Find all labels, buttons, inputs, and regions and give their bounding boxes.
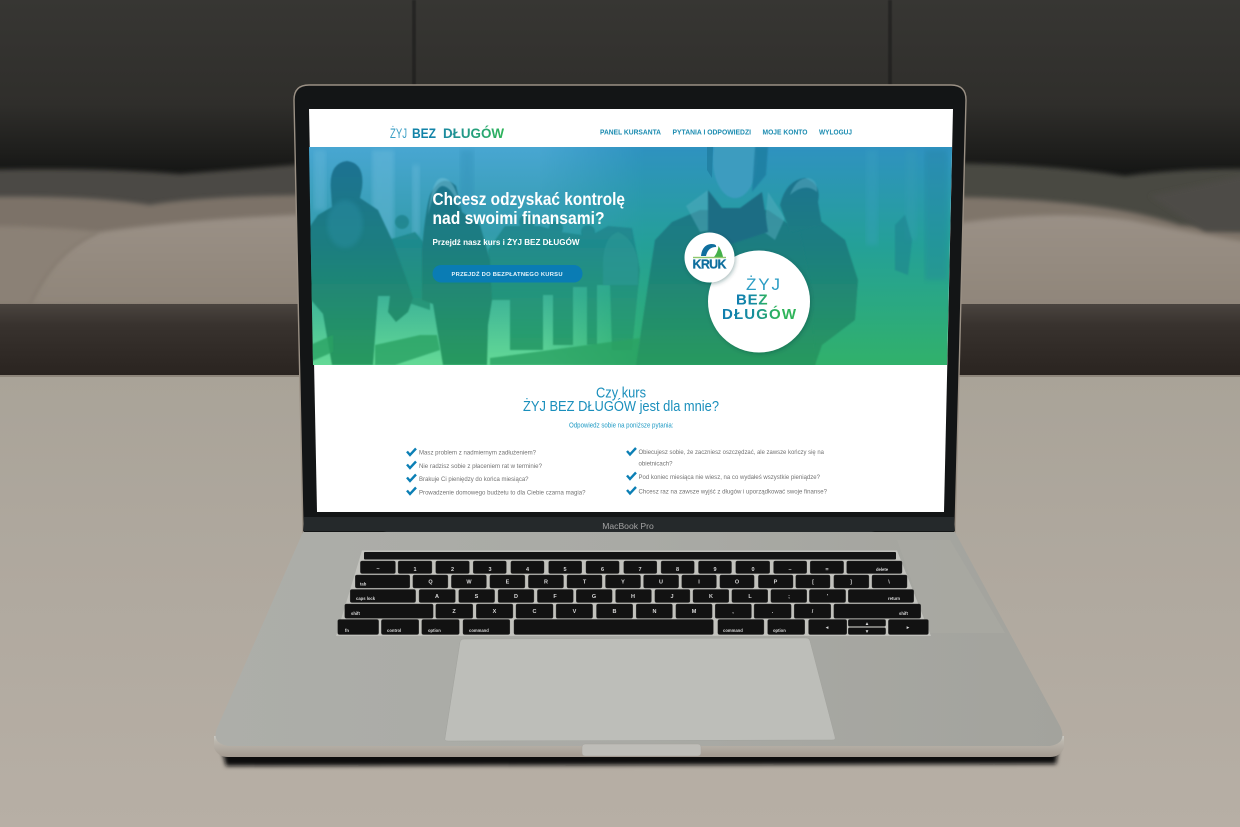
lid opening notch <box>582 744 701 756</box>
row 3: H <box>631 594 635 600</box>
tan band left <box>0 195 320 310</box>
site header <box>390 124 852 141</box>
row 1: 6 <box>601 567 604 573</box>
question list left <box>407 448 586 496</box>
row 1: 1 <box>413 567 417 573</box>
row 4: shift <box>899 611 908 616</box>
row 2: [ <box>812 580 814 586</box>
upper cushion right <box>940 163 1240 250</box>
table <box>0 375 1240 827</box>
light cushion right <box>940 215 1240 310</box>
row 2: U <box>659 580 663 586</box>
screen <box>305 109 955 512</box>
row 1: 8 <box>676 567 679 573</box>
row 3: A <box>435 594 439 600</box>
question list left: Nie radzisz sobie z płaceniem rat w terminie? <box>419 463 542 470</box>
upper cushion left <box>0 163 320 240</box>
row 2: R <box>544 580 548 586</box>
section heading: ŻYJ BEZ DŁUGÓW jest dla mnie? <box>523 397 719 415</box>
row 3: caps lock <box>356 596 376 601</box>
backpack person <box>603 232 638 285</box>
row 5: ▸ <box>907 625 910 631</box>
question list left: Prowadzenie domowego budżetu to dla Ciebie czarna magia? <box>419 490 586 496</box>
row 5: command <box>723 628 743 633</box>
row 3: G <box>592 594 596 600</box>
question list right: Pod koniec miesiąca nie wiesz, na co wydałeś wszystkie pieniądze? <box>638 474 820 481</box>
keyboard well <box>336 550 931 636</box>
light cushion left corner <box>0 226 100 305</box>
sofa seam left <box>412 0 416 170</box>
row 2: T <box>583 580 587 586</box>
table edge highlight <box>0 375 1240 377</box>
row 3: S <box>475 594 479 600</box>
row 5: control <box>387 628 401 633</box>
row 5: command <box>469 628 489 633</box>
row 5: ◂ <box>826 625 829 631</box>
shadow under laptop <box>222 750 1058 766</box>
collar <box>708 190 768 246</box>
site logo: ŻYJ <box>390 124 407 141</box>
row 3 <box>350 590 914 602</box>
row 4 <box>345 604 921 618</box>
question list right: obietnicach? <box>638 460 673 467</box>
row 3: D <box>514 594 518 600</box>
hero heading: Chcesz odzyskać kontrolę <box>432 189 625 209</box>
check icons left <box>407 448 416 494</box>
lid bezel <box>294 85 966 533</box>
row 1: delete <box>876 567 889 572</box>
row 5: option <box>428 628 441 633</box>
street shadows <box>310 335 640 365</box>
hair right <box>752 147 768 192</box>
background buildings <box>314 147 955 365</box>
deck <box>216 532 1062 746</box>
row 4: / <box>812 609 814 615</box>
section heading: Czy kurs <box>596 384 646 402</box>
right speaker tone <box>897 540 1005 633</box>
navigation: PYTANIA I ODPOWIEDZI <box>672 130 751 136</box>
navigation <box>600 130 852 136</box>
big round logo badge: ŻYJ <box>746 275 780 294</box>
row 4: Z <box>452 609 456 615</box>
laptop base <box>214 532 1064 766</box>
question list right: Obiecujesz sobie, że zaczniesz oszczędzać, ale zawsze kończy się na <box>638 449 824 456</box>
navigation: MOJE KONTO <box>762 130 808 136</box>
distant figure <box>895 215 912 275</box>
row 3: ' <box>827 594 829 600</box>
hinge bar with brand <box>303 517 955 533</box>
front edge <box>214 736 1064 757</box>
row 1: ~ <box>376 566 380 572</box>
KRUK logo badge <box>684 232 734 282</box>
right person head <box>780 178 822 224</box>
hero heading <box>432 189 625 228</box>
right person cap <box>790 178 817 195</box>
KRUK line <box>693 257 726 258</box>
hero photo with gradient tint <box>309 147 952 365</box>
question list left: Masz problem z nadmiernym zadłużeniem? <box>419 450 536 457</box>
row 2 <box>355 575 907 588</box>
hooded person <box>422 181 492 365</box>
page white background <box>309 109 953 512</box>
row 1: 3 <box>488 567 492 573</box>
row 5: ▾ <box>866 629 869 635</box>
row 3: ; <box>788 594 790 600</box>
face <box>713 147 755 198</box>
row 2: Y <box>621 580 625 586</box>
navigation: PANEL KURSANTA <box>600 130 661 136</box>
row 3: return <box>888 596 901 601</box>
row 4: X <box>493 609 497 615</box>
row 1: 0 <box>751 567 755 573</box>
dark lower cushion tuft right <box>1150 172 1240 232</box>
row 2: W <box>466 580 472 586</box>
row 3: F <box>553 594 557 600</box>
call to action button: PRZEJDŹ DO BEZPŁATNEGO KURSU <box>452 270 562 278</box>
right person body <box>798 222 858 364</box>
hero banner <box>309 147 952 365</box>
row 2: \ <box>888 580 890 586</box>
row 1: 7 <box>638 567 642 573</box>
row 1: 5 <box>563 567 567 573</box>
question list left: Brakuje Ci pieniędzy do końca miesiąca? <box>419 476 529 483</box>
big round logo badge: DŁUGÓW <box>722 305 797 323</box>
call to action button <box>432 265 582 282</box>
row 4: , <box>732 609 734 615</box>
KRUK logo badge: KRUK <box>692 258 726 272</box>
row 2: E <box>506 580 510 586</box>
sofa back <box>0 0 1240 190</box>
row 2: tab <box>360 582 367 586</box>
left person <box>306 161 413 365</box>
row 1: 2 <box>451 567 454 573</box>
touch bar <box>364 552 896 560</box>
sofa front band <box>0 304 1240 375</box>
row 2: P <box>774 580 778 586</box>
hero heading: nad swoimi finansami? <box>432 208 604 228</box>
row 2: I <box>698 580 700 586</box>
light cushion left <box>30 214 320 306</box>
row 3: K <box>709 594 713 600</box>
row 5 <box>338 620 928 635</box>
left person shoulder highlight <box>327 200 363 248</box>
row 5: fn <box>345 628 349 633</box>
row 5: ▴ <box>866 621 869 627</box>
distant crowd <box>388 214 640 350</box>
KRUK arc <box>701 244 716 256</box>
hero subheading: Przejdź nasz kurs i ŻYJ BEZ DŁUGÓW <box>432 236 580 247</box>
row 2: O <box>735 580 740 586</box>
row 4: . <box>772 609 774 615</box>
row 3: J <box>670 594 674 600</box>
question list right <box>627 448 827 496</box>
section heading <box>523 384 719 415</box>
row 4: M <box>692 609 697 615</box>
row 1: 9 <box>713 567 717 573</box>
laptop lid <box>294 85 966 533</box>
row 4: shift <box>351 611 360 616</box>
coat hood band <box>686 190 785 240</box>
row 4: V <box>573 609 577 615</box>
question list right: Chcesz raz na zawsze wyjść z długów i uporządkować swoje finanse? <box>638 488 827 496</box>
row 5: option <box>773 628 786 633</box>
keyboard keys <box>338 561 928 635</box>
row 4: N <box>653 609 657 615</box>
row 1 <box>360 561 902 574</box>
hinge bar with brand: MacBook Pro <box>602 521 654 531</box>
trackpad <box>445 638 835 741</box>
row 4: C <box>533 609 537 615</box>
navigation: WYLOGUJ <box>819 130 852 136</box>
hood highlight <box>428 178 460 215</box>
section subheading: Odpowiedz sobie na poniższe pytania: <box>569 422 674 430</box>
big round logo badge: BEZ <box>736 292 768 308</box>
big round logo badge <box>708 250 810 352</box>
check icons right <box>627 448 636 494</box>
row 2: ] <box>850 580 852 586</box>
row 2: Q <box>428 580 433 586</box>
row 1: 4 <box>526 567 530 573</box>
site logo <box>390 124 505 141</box>
site logo: DŁUGÓW <box>443 124 505 141</box>
site logo: BEZ <box>412 125 436 141</box>
foreground woman coat <box>636 210 790 365</box>
row 4: B <box>613 609 617 615</box>
KRUK sail <box>714 246 723 257</box>
tan band right <box>940 197 1240 312</box>
row 1: – <box>788 567 792 573</box>
sofa seam right <box>888 0 892 170</box>
row 1: = <box>825 567 829 573</box>
hair left <box>707 147 713 178</box>
row 3: L <box>748 594 752 600</box>
